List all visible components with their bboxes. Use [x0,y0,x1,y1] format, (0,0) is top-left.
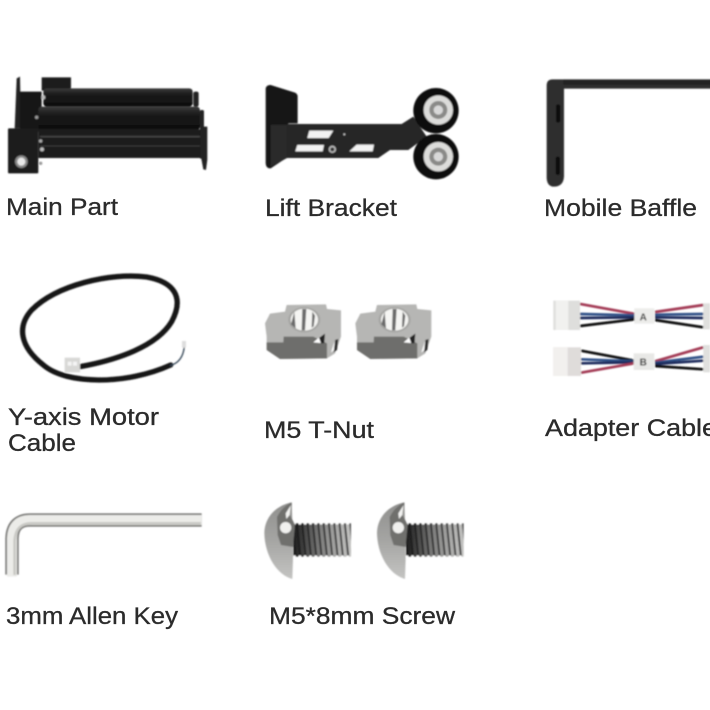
label: Mobile Baffle: Mobile Baffle [544,195,697,222]
M5 T-Nut [264,304,431,444]
image: lift bracket with wheels [266,85,459,179]
image: adapter cables A and B: A [640,313,647,324]
label: Y-axis Motor Cable: Y-axis Motor [8,404,159,431]
Lift Bracket [265,85,459,222]
label: 3mm Allen Key: 3mm Allen Key [6,603,178,630]
M5*8mm Screw [264,502,464,630]
image: mobile baffle L-bracket [547,79,710,187]
image: two M5 screws [264,502,464,579]
image: main part rotary roller [8,77,207,173]
label: Y-axis Motor Cable [8,404,159,457]
image: two T-nuts [265,304,431,359]
label: Lift Bracket: Lift Bracket [265,195,397,222]
Main Part [6,77,207,221]
Adapter Cable [545,301,710,442]
label: M5*8mm Screw: M5*8mm Screw [269,603,456,630]
3mm Allen Key [6,520,202,630]
label: M5 T-Nut: M5 T-Nut [264,417,374,444]
label: Y-axis Motor Cable: Cable [8,430,76,457]
Y-axis Motor Cable [8,276,186,457]
image: Allen key [12,520,202,577]
Mobile Baffle [544,79,710,222]
label: Main Part: Main Part [6,194,118,221]
image: coiled motor cable [23,276,186,380]
image: adapter cables A and B [553,301,710,376]
label: Adapter Cable: Adapter Cable [545,415,710,442]
image: adapter cables A and B: B [640,358,647,369]
